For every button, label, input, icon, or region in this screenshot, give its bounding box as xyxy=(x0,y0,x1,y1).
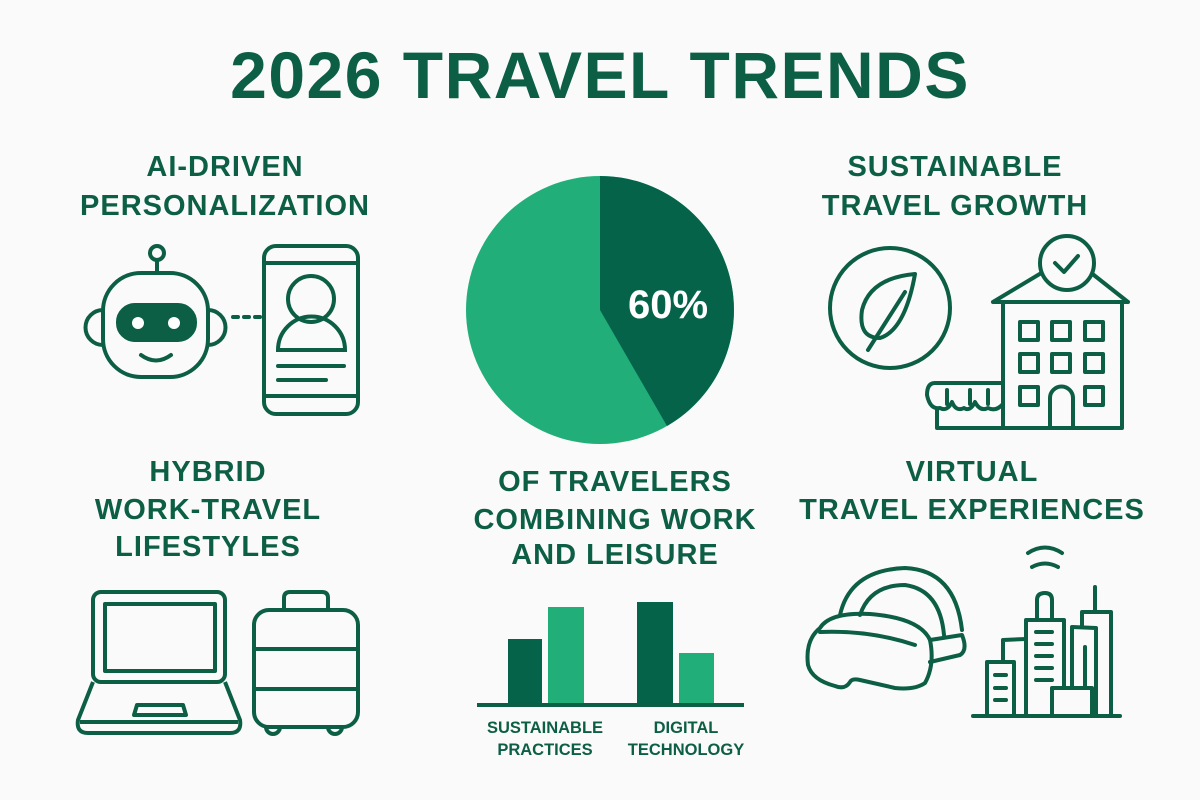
heading: hybrid work-travel lifestyles: HYBRID xyxy=(149,456,267,488)
heading: hybrid work-travel lifestyles: LIFESTYLES xyxy=(115,531,301,563)
heading: virtual travel experiences xyxy=(799,456,1145,526)
heading: hybrid work-travel lifestyles xyxy=(95,456,321,563)
bar chart: PRACTICES xyxy=(497,741,593,759)
heading: virtual travel experiences: VIRTUAL xyxy=(906,456,1038,488)
text: of travelers combining work and leisure: AND LEISURE xyxy=(511,539,719,571)
heading: AI-driven personalization xyxy=(80,151,370,222)
bar chart xyxy=(477,602,744,759)
icon: laptop and suitcase xyxy=(78,592,358,734)
heading: sustainable travel growth: SUSTAINABLE xyxy=(847,151,1063,183)
icon: robot and phone xyxy=(86,246,358,414)
heading: AI-driven personalization: PERSONALIZATION xyxy=(80,190,370,222)
text: of travelers combining work and leisure: OF TRAVELERS xyxy=(498,466,732,498)
text: of travelers combining work and leisure: COMBINING WORK xyxy=(473,504,757,536)
heading: virtual travel experiences: TRAVEL EXPERIENCES xyxy=(799,494,1145,526)
title: 2026 TRAVEL TRENDS xyxy=(230,38,970,112)
heading: sustainable travel growth xyxy=(822,151,1088,222)
icon: leaf and hotel xyxy=(830,236,1128,428)
bar chart: TECHNOLOGY xyxy=(628,741,744,759)
heading: AI-driven personalization: AI-DRIVEN xyxy=(146,151,304,183)
heading: sustainable travel growth: TRAVEL GROWTH xyxy=(822,190,1088,222)
icon: VR headset and city xyxy=(808,548,1120,716)
bar chart: DIGITAL xyxy=(654,719,718,737)
pie chart xyxy=(466,176,734,444)
text: of travelers combining work and leisure xyxy=(473,466,757,571)
pie chart: 60% xyxy=(628,283,708,327)
heading: hybrid work-travel lifestyles: WORK-TRAVEL xyxy=(95,494,321,526)
bar chart: SUSTAINABLE xyxy=(487,719,603,737)
